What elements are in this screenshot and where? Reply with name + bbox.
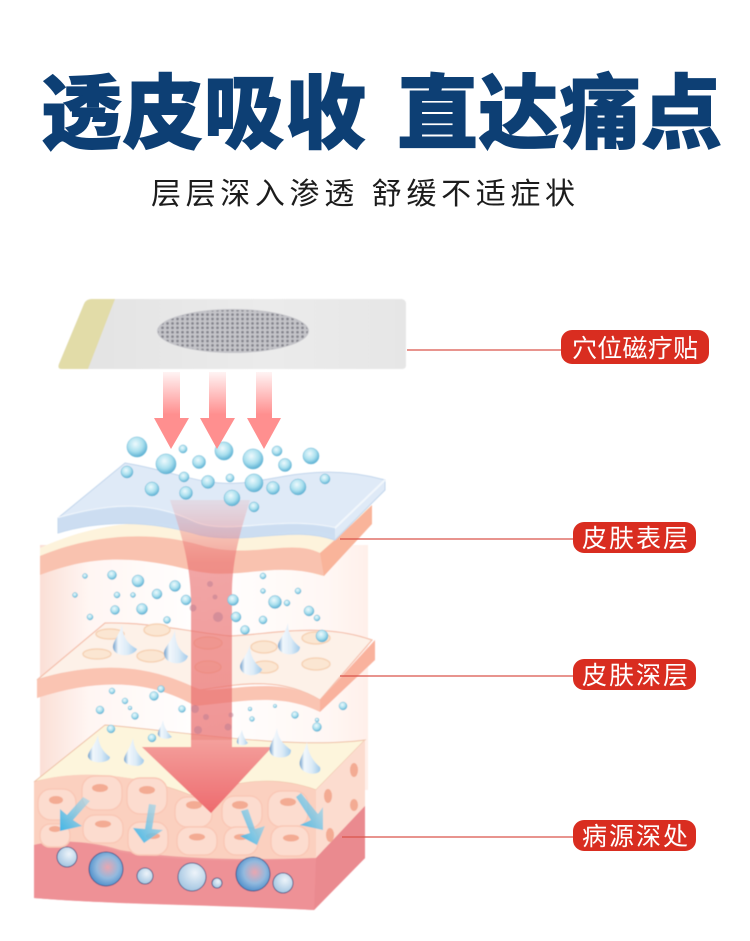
label: 穴位磁疗贴: 穴位磁疗贴 [572, 335, 698, 363]
bubbles cluster: dermis [72, 570, 328, 642]
icon: big red arrow [142, 500, 272, 813]
icon: blue cell arrows [60, 793, 323, 845]
magnetic centre [157, 309, 309, 353]
patch backing [58, 299, 406, 369]
label: 皮肤深层: 皮肤深层 [582, 662, 688, 690]
bubbles cluster: lower [96, 686, 347, 742]
skin illustration [34, 437, 385, 910]
layer: dermis plate [37, 623, 375, 712]
layer: skin surface [40, 505, 372, 576]
subtitle: 层层深入渗透 舒缓不适症状 [151, 178, 575, 211]
leader lines [340, 350, 574, 837]
patch yellow edge [58, 299, 115, 369]
layer: cell base [34, 725, 365, 910]
title: 透皮吸收 [41, 70, 366, 160]
water droplets [88, 623, 320, 774]
title: 直达痛点 [397, 70, 722, 160]
bubbles cluster: surface [121, 437, 330, 512]
pale tissue background [40, 545, 368, 790]
layer: blue film [58, 463, 385, 540]
icon: three downward arrows [154, 372, 281, 449]
label: 病源深处: 病源深处 [582, 823, 688, 851]
label: 皮肤表层: 皮肤表层 [582, 525, 688, 553]
large bubbles in pink layer [57, 847, 293, 893]
patch [58, 299, 406, 369]
title [41, 70, 722, 160]
